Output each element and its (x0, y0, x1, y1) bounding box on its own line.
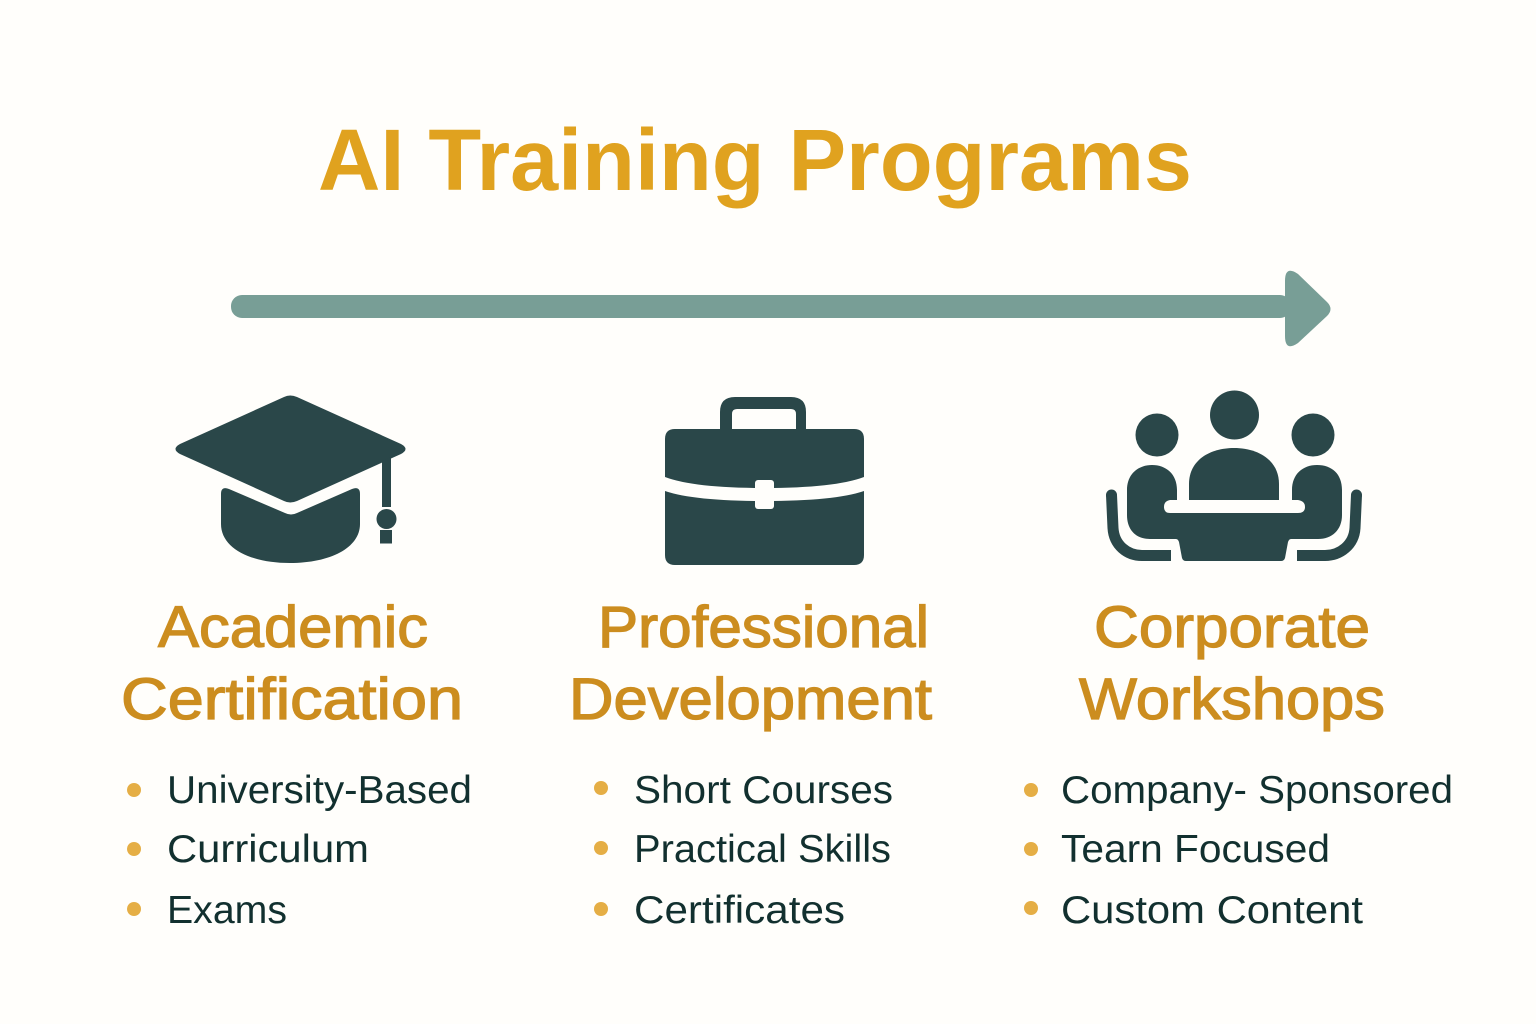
title: AI Training Programs (318, 112, 1192, 209)
heading: corporate workshops (1079, 595, 1385, 732)
list: professional development: Certificates (634, 889, 845, 932)
heading: academic certification (121, 595, 463, 732)
heading: professional development: Professional (598, 595, 929, 660)
list: academic certification: University-Based (167, 769, 472, 812)
list: corporate workshops: Custom Content (1061, 889, 1363, 932)
arrow (231, 271, 1330, 346)
heading: academic certification: Academic (158, 595, 428, 660)
heading: professional development (569, 595, 932, 732)
list: academic certification: Exams (167, 889, 287, 932)
icon: meeting group (1106, 390, 1362, 561)
icon: briefcase (665, 397, 864, 565)
list: professional development (594, 769, 893, 932)
list: professional development: Practical Skills (634, 828, 891, 871)
panel: professional development (569, 397, 932, 932)
list: academic certification: Curriculum (167, 828, 369, 871)
panel: corporate workshops (1024, 390, 1453, 932)
heading: corporate workshops: Corporate (1094, 595, 1370, 660)
heading: professional development: Development (569, 667, 932, 732)
list: corporate workshops: Company- Sponsored (1061, 769, 1453, 812)
icon: graduation cap (176, 396, 406, 563)
heading: corporate workshops: Workshops (1079, 667, 1385, 732)
list: professional development: Short Courses (634, 769, 893, 812)
list: academic certification (127, 769, 472, 932)
panel: academic certification (121, 396, 472, 932)
list: corporate workshops (1024, 769, 1453, 932)
list: corporate workshops: Tearn Focused (1061, 828, 1330, 871)
heading: academic certification: Certification (121, 667, 463, 732)
